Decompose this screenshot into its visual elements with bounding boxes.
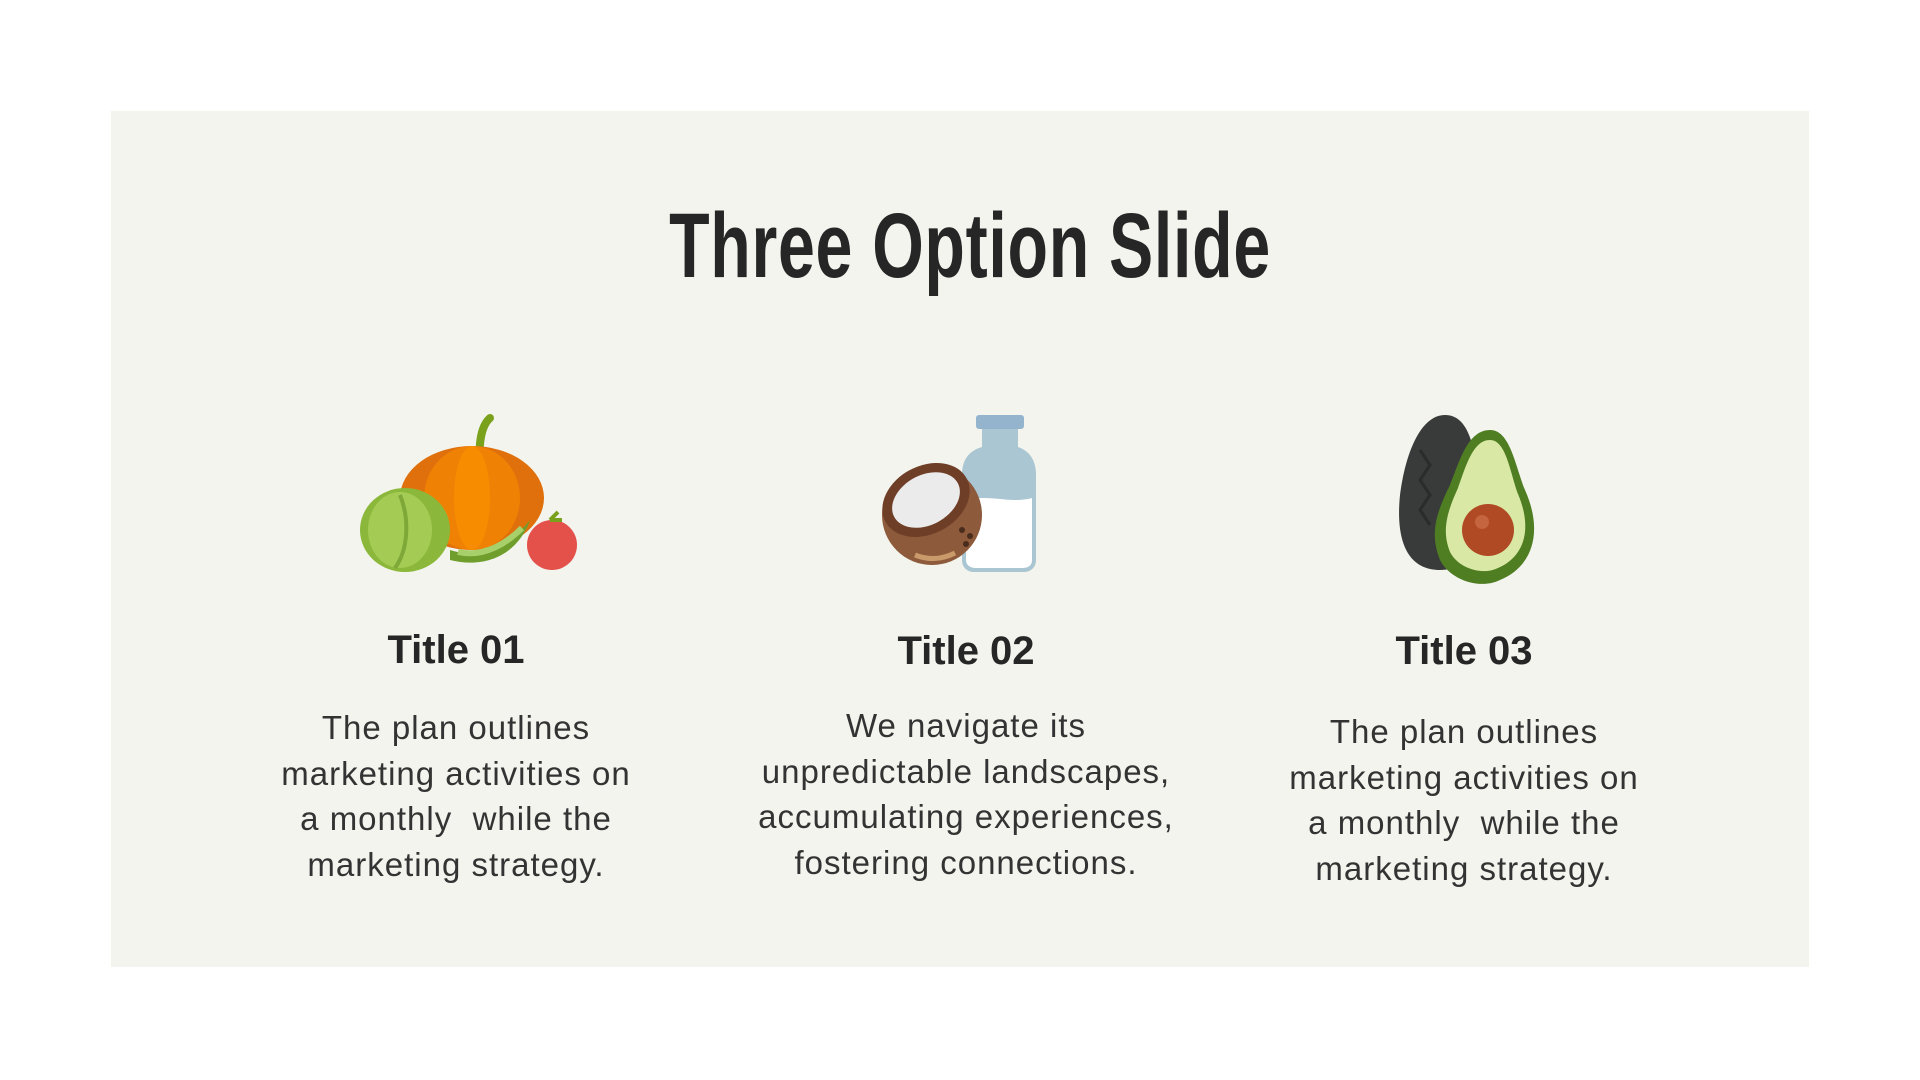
heading: Title 02: Title 02 <box>897 629 1035 673</box>
text block 1: marketing activities on <box>281 754 631 792</box>
panel: background <box>111 111 1809 967</box>
text block 2 <box>758 707 1174 881</box>
text block 1: The plan outlines <box>322 709 590 746</box>
text block 2: fostering connections. <box>794 844 1138 880</box>
icon: vegetables <box>360 414 577 572</box>
text block 3: The plan outlines <box>1330 713 1598 750</box>
text block 2: unpredictable landscapes, <box>762 752 1170 790</box>
text block 2: accumulating experiences, <box>758 798 1174 835</box>
icon: coconut and milk <box>882 415 1036 572</box>
text block 3 <box>1289 713 1639 887</box>
icon: avocado <box>1399 415 1534 584</box>
text block 1: a monthly while the <box>300 800 612 837</box>
text block 3: marketing activities on <box>1289 758 1639 796</box>
title: Three Option Slide <box>669 195 1271 297</box>
text block 1 <box>281 709 631 883</box>
text block 3: marketing strategy. <box>1315 850 1613 886</box>
column 2 <box>758 629 1174 881</box>
text block 2: We navigate its <box>846 707 1086 744</box>
text block 3: a monthly while the <box>1308 804 1620 841</box>
column 3 <box>1289 629 1639 887</box>
text block 1: marketing strategy. <box>307 846 605 882</box>
column 1 <box>281 628 631 883</box>
heading: Title 01: Title 01 <box>387 628 525 672</box>
heading: Title 03: Title 03 <box>1395 629 1533 673</box>
